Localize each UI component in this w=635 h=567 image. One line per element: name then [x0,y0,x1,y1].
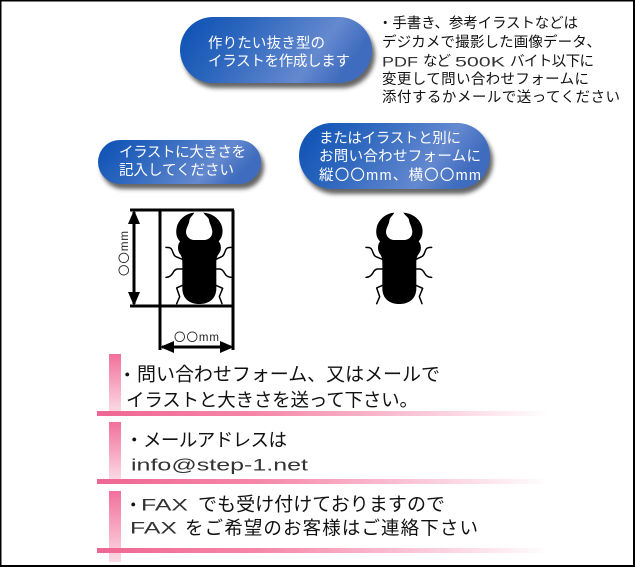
pill: write the size on the illustration [98,140,264,189]
arrow: width [160,341,234,353]
text block: accepted file formats: 500K [455,54,505,70]
text block: accepted file formats: バイト以下に [510,54,594,70]
panel: mail address: info@step-1.net [131,456,308,474]
text block: accepted file formats [378,15,620,106]
panel: mail address: ・ [125,430,144,450]
panel: send by form or mail: 問い合わせフォーム、又はメールで [137,364,440,386]
panel: fax: でも受け付けておりますので [198,494,445,516]
panel: mail address [97,422,550,484]
text block: accepted file formats: デジカメで撮影した画像データ、 [382,33,601,51]
pill: write the size on the illustration: 記入してください [119,162,234,179]
text block: accepted file formats: ・手書き、参考イラストなどは [378,15,578,32]
panel: send by form or mail: ・ [118,364,137,386]
pill: create illustration: 作りたい抜き型の [208,35,325,52]
arrow: height [128,210,140,306]
text block: accepted file formats: 添付するかメールで送ってください [382,89,620,106]
panel: send by form or mail [97,354,550,416]
pill: or send dimensions through the form: またはイラストと別に [319,130,461,147]
pill: or send dimensions through the form [299,123,493,194]
text block: accepted file formats: など [423,53,452,70]
icon: stag beetle silhouette [166,213,232,304]
panel: fax: FAX [141,496,188,514]
panel: fax: をご希望のお客様はご連絡下さい [185,518,478,538]
pill: or send dimensions through the form: お問い合わせフォームに [319,148,481,165]
panel: mail address: メールアドレスは [143,430,287,450]
text block: accepted file formats: PDF [382,54,418,70]
panel: fax [97,491,550,562]
pill: or send dimensions through the form: 縦〇〇mm、横〇〇mm [319,167,481,184]
panel: send by form or mail: イラストと大きさを送って下さい。 [126,390,418,410]
pill: write the size on the illustration: イラストに大きさを [119,144,246,161]
panel: fax: ・ [124,494,143,516]
dimension frame [130,210,234,350]
pill: create illustration [180,17,375,88]
text block: accepted file formats: 変更して問い合わせフォームに [382,71,589,88]
icon: stag beetle silhouette, no dimensions [366,213,432,304]
label: height: 〇〇mm [118,231,131,276]
label: width: 〇〇mm [174,331,219,344]
icon: stag beetle with dimension lines [118,210,234,353]
panel: fax: FAX [130,518,177,538]
pill: create illustration: イラストを作成します [208,53,350,70]
